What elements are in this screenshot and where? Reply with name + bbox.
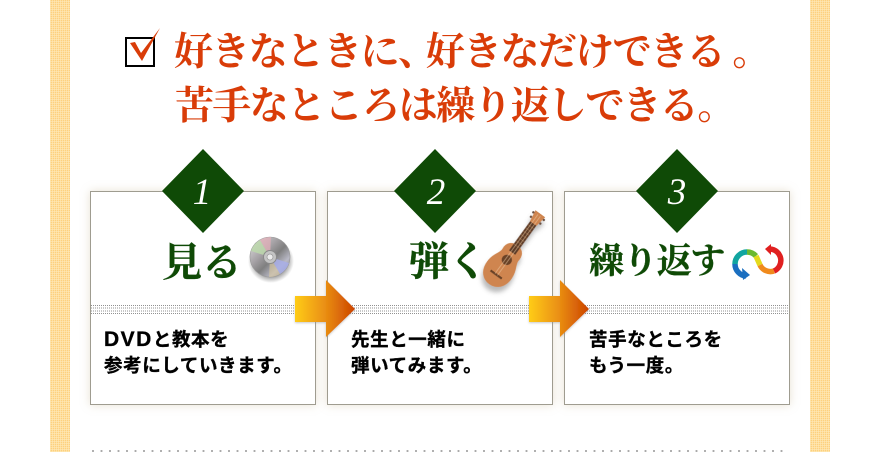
text: step 2 description: [351, 329, 482, 376]
text: step 1 description: 参考にしていきます。: [104, 355, 293, 376]
panel: step 2: [327, 191, 553, 405]
icon: checkbox: [125, 28, 160, 67]
text: step 1 description: DVDと教本を: [104, 328, 229, 351]
icon: DVD disc: [248, 236, 294, 282]
icon: rainbow loop arrows: [732, 244, 784, 280]
text: step 1 description: [104, 328, 293, 376]
text: step 2 description: 先生と一緒に: [351, 329, 466, 350]
badge: number 3: 3: [667, 172, 686, 213]
badge: number 2: [394, 149, 476, 233]
badge: number 1: [162, 149, 244, 233]
text: step 3 description: もう一度。: [589, 355, 684, 376]
arrow: step 1 to 2: [294, 280, 356, 338]
heading line 1: 好きなときに、好きなだけできる。: [174, 31, 770, 74]
heading line 2: 苦手なところは繰り返しできる。: [175, 85, 735, 128]
right decorative band: [810, 0, 830, 452]
label: 弾く: 弾く: [409, 239, 487, 284]
badge: number 2: 2: [427, 172, 445, 213]
label: 見る: 見る: [162, 240, 242, 285]
panel: step 1: [90, 191, 316, 405]
badge: number 3: [636, 149, 718, 233]
icon: ukulele: [480, 210, 546, 294]
arrow: step 2 to 3: [528, 280, 590, 338]
label: 繰り返す: 繰り返す: [589, 242, 724, 281]
left decorative band: [50, 0, 70, 452]
text: step 2 description: 弾いてみます。: [351, 355, 482, 376]
text: step 3 description: [589, 329, 723, 376]
badge: number 1: 1: [193, 172, 211, 213]
panel: step 3: [564, 191, 790, 405]
text: step 3 description: 苦手なところを: [589, 329, 723, 350]
